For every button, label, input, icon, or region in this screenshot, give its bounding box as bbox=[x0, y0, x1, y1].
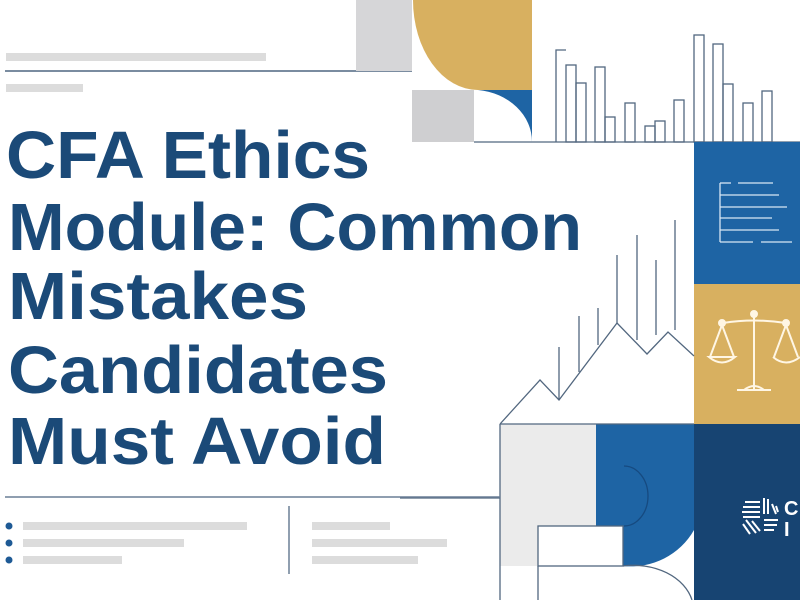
top geometric blocks bbox=[356, 0, 532, 142]
title bbox=[6, 118, 582, 479]
footer bullet list placeholders bbox=[5, 497, 500, 574]
title: Must Avoid bbox=[8, 404, 386, 479]
mountain line chart decoration bbox=[400, 220, 694, 600]
title: CFA Ethics bbox=[6, 118, 370, 193]
right panel: gold with scales icon bbox=[694, 284, 800, 424]
title: Candidates bbox=[8, 333, 388, 408]
right panel: navy with logo: I bbox=[784, 519, 790, 541]
right panel: navy with logo: C bbox=[784, 498, 798, 520]
right panel: blue with document icon bbox=[694, 142, 800, 284]
title: Module: Common bbox=[8, 190, 582, 265]
bar chart bbox=[474, 35, 800, 142]
title: Mistakes bbox=[8, 259, 308, 334]
header placeholder bars bbox=[5, 53, 412, 92]
right panel: navy with logo bbox=[694, 424, 800, 600]
